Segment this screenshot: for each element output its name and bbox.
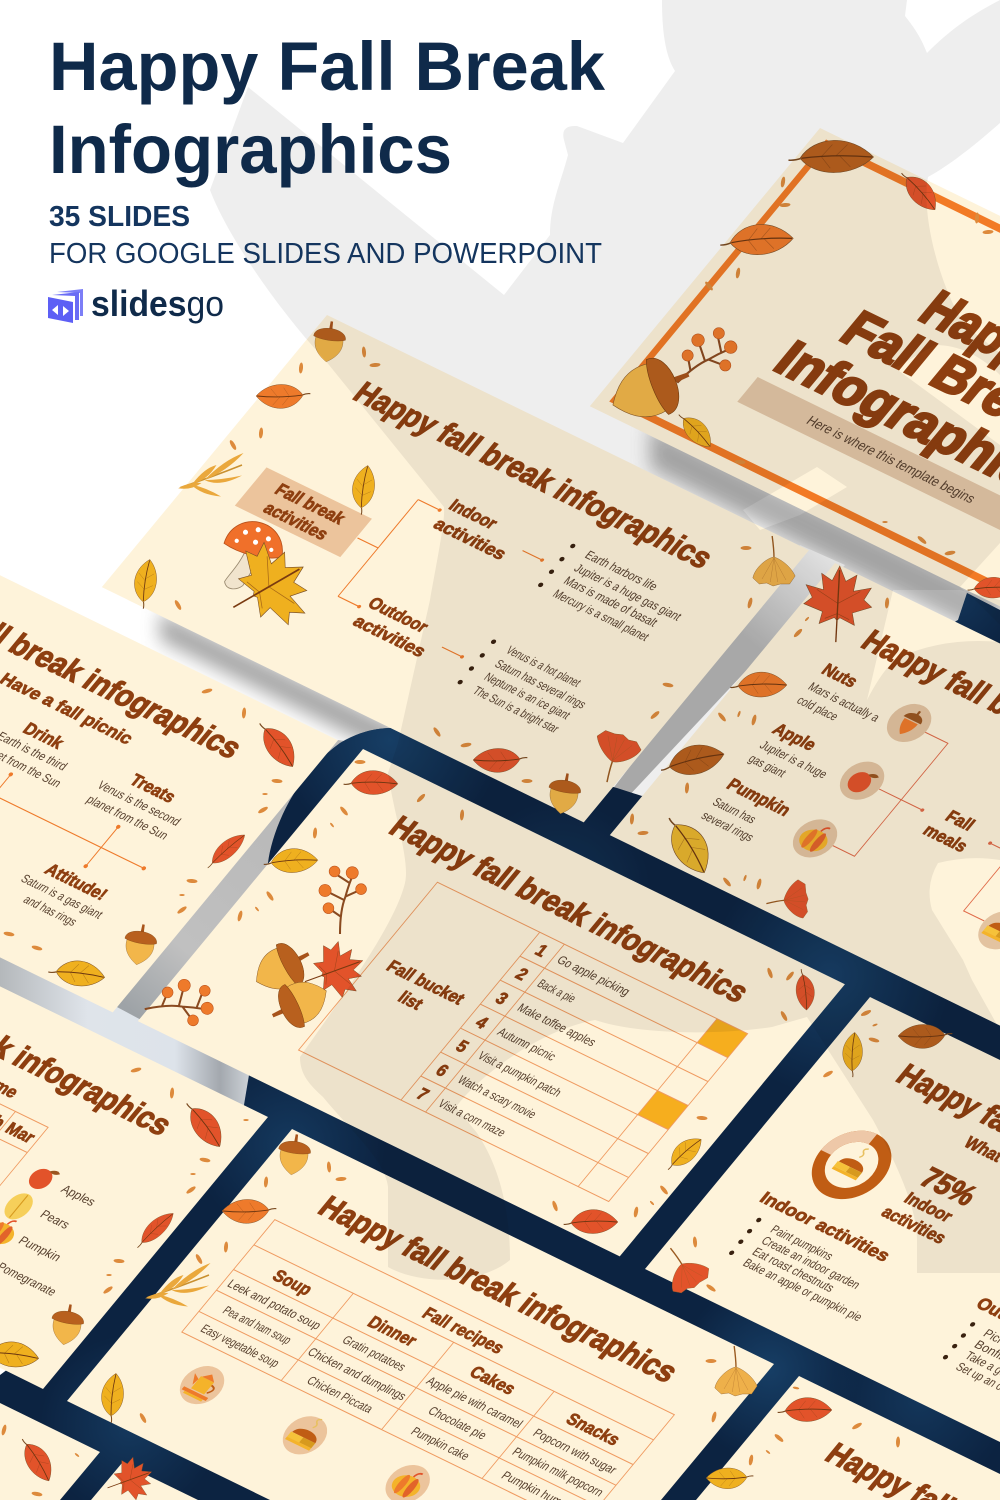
- fruit labels: Apples: [58, 1182, 99, 1209]
- list: indoor: Create an indoor garden: [758, 1234, 863, 1292]
- icon: red maple leaf: [296, 935, 372, 1008]
- icon: orange leaf: [222, 1199, 276, 1223]
- item: pumpkin: Pumpkin: [723, 775, 795, 820]
- column headings: [268, 1266, 624, 1449]
- column: soup: Leek and potato soup: [224, 1277, 324, 1333]
- logo wordmark: slidesgo: [91, 283, 224, 324]
- grey band between picnic slide and bucket list slide: [113, 740, 372, 1025]
- table items: Watch a scary movie: [455, 1073, 540, 1121]
- icon: teapot circle: [171, 1360, 233, 1411]
- icon: nut circle: [878, 698, 940, 748]
- grey band between activities slide and meals slide: [585, 545, 845, 825]
- panel: cover slide: [590, 128, 1000, 641]
- list: outdoor: The Sun is a bright star: [470, 684, 562, 736]
- icon: pie circle: [274, 1410, 336, 1461]
- column: cakes: Apple pie with caramel: [423, 1374, 526, 1431]
- slide card: [0, 1403, 100, 1500]
- icon: red leaf: [778, 1398, 832, 1422]
- table numbers: 6: [432, 1061, 453, 1080]
- slide title: Happy fall break infographics: [311, 1190, 685, 1389]
- list: indoor: [714, 1188, 911, 1324]
- list: indoor: Bake an apple or pumpkin pie: [740, 1256, 866, 1324]
- table numbers: 3: [491, 989, 512, 1008]
- table numbers: 4: [471, 1013, 493, 1033]
- list: indoor: Indoor activities: [756, 1188, 894, 1265]
- panel: fall meals slide: [610, 563, 1000, 1070]
- block: attitude: Saturn is a gas giant: [18, 872, 106, 922]
- label box: [235, 467, 372, 557]
- item: nuts: Mars is actually a: [805, 680, 883, 725]
- list: indoor: Paint pumpkins: [767, 1223, 836, 1263]
- slide card with meals text: [610, 563, 1000, 1070]
- squirrel silhouette overlay: [210, 0, 1000, 1280]
- column: dinner: [287, 1324, 427, 1424]
- list: outdoor: [930, 1294, 1000, 1424]
- panel: lower right slide: [696, 1376, 1000, 1500]
- shadow below activities slide: [160, 612, 620, 870]
- icon: berries: [662, 318, 746, 402]
- label box: activities: [259, 499, 332, 544]
- item: apple: gas giant: [745, 752, 790, 780]
- table label: Fall bucket: [382, 957, 469, 1008]
- icon: narrow red leaf: [202, 829, 250, 873]
- icon: apple circle: [831, 755, 893, 806]
- stat: 75%: [913, 1162, 983, 1212]
- icon: red leaf: [473, 748, 527, 772]
- slide count: 35 SLIDES: [49, 201, 190, 233]
- icon: acorn: [121, 922, 159, 967]
- icon: falling petals: [139, 1161, 717, 1424]
- center label: [919, 803, 986, 856]
- icon: berries left: [140, 974, 217, 1035]
- icon: sprig: [178, 453, 244, 496]
- icon: falling petals: [748, 1386, 900, 1466]
- table label: [367, 957, 469, 1027]
- column: dinner: Gratin potatoes: [339, 1333, 409, 1374]
- table items: Make toffee apples: [514, 1001, 599, 1049]
- icon: brown leaf: [788, 140, 873, 173]
- icon: yellow leaf: [47, 957, 107, 989]
- column: soup: Pea and ham soup: [220, 1304, 295, 1347]
- column: cakes: Pumpkin cake: [408, 1424, 473, 1463]
- icon: pumpkin circle: [784, 813, 846, 864]
- slide title: Happy fall break infographics: [346, 376, 720, 575]
- slidesgo logo: [48, 283, 224, 324]
- icon: pie circle: [969, 904, 1000, 956]
- connector: [0, 690, 164, 890]
- icon: corner red leaf: [968, 577, 1000, 598]
- icon: falling petals: [1, 1424, 80, 1497]
- slide text with recipes table: [142, 1178, 709, 1500]
- stat: activities: [877, 1202, 950, 1248]
- icon: maple leaf: [802, 564, 874, 644]
- icon: acorn two: [263, 970, 336, 1037]
- table items: Back a pie: [534, 977, 579, 1005]
- heading: indoor: [429, 496, 526, 564]
- fruit labels: [0, 1182, 124, 1299]
- icon: acorn: [275, 1132, 313, 1177]
- item: apple: Apple: [768, 720, 821, 754]
- icon: acorn top: [310, 319, 348, 364]
- label box: Fall break: [271, 480, 350, 528]
- slide card with activities text: [102, 315, 809, 822]
- icon: large acorn: [602, 347, 700, 432]
- table items: Visit a pumpkin patch: [475, 1049, 565, 1099]
- fruit icons: [0, 1163, 65, 1248]
- block: drink: Drink: [19, 719, 68, 753]
- item: apple: [745, 720, 846, 795]
- heading: indoor: activities: [429, 514, 511, 564]
- list: indoor: Eat roast chestnuts: [749, 1245, 838, 1295]
- icon: falling petals: [704, 176, 994, 556]
- icon: yellow leaf left: [130, 558, 160, 610]
- column headings: Snacks: [562, 1410, 624, 1449]
- column: soup: [190, 1277, 324, 1374]
- subtitle band: Here is where this template begins: [803, 413, 979, 506]
- heading: outdoor: activities: [349, 612, 430, 661]
- table items: Go apple picking: [554, 953, 633, 999]
- item: nuts: [794, 660, 899, 738]
- slide card: [696, 1376, 1000, 1500]
- list: outdoor: [453, 635, 601, 738]
- icon: yellow leaf: [348, 464, 378, 516]
- icon: red leaf right: [794, 968, 816, 1011]
- icon: orange leaf: [256, 384, 310, 408]
- icon: acorn: [48, 1302, 86, 1347]
- icon: ginkgo: [715, 1346, 757, 1396]
- stat: Indoor: [900, 1189, 957, 1226]
- connector: [316, 488, 545, 659]
- table header: [0, 1104, 40, 1147]
- icon: berries top: [319, 866, 367, 934]
- icon: sprig: [145, 1263, 210, 1306]
- table numbers: 7: [412, 1085, 433, 1104]
- table grid: [182, 1220, 674, 1500]
- table grid: [299, 882, 748, 1201]
- panel: fall recipes slide: [67, 1129, 774, 1500]
- heading: outdoor: [349, 594, 445, 661]
- icon: red leaf lower: [564, 1210, 618, 1234]
- panel: bucket list slide: [138, 749, 845, 1256]
- icon: falling petals: [102, 1067, 249, 1295]
- list: indoor: Mercury is a small planet: [550, 587, 653, 644]
- icon: yellow leaf: [0, 1338, 41, 1370]
- table header: Mar: [1, 1119, 40, 1147]
- slide card: [91, 1463, 198, 1500]
- table items: [435, 953, 644, 1147]
- icon: red maple leaf: [100, 1452, 159, 1500]
- center label: Fall: [941, 807, 979, 834]
- list: indoor: Earth harbors life: [582, 548, 661, 594]
- icon: falling petals: [693, 1009, 880, 1293]
- column: dinner: Chicken Piccata: [304, 1374, 376, 1416]
- cover title: [763, 244, 1000, 511]
- item: apple: Jupiter is a huge: [757, 738, 831, 781]
- table label: list: [394, 988, 427, 1014]
- column: snacks: [492, 1424, 624, 1500]
- connector: [831, 732, 1000, 921]
- item: pumpkin: [698, 775, 795, 849]
- icon: pumpkin circle: [376, 1459, 439, 1500]
- icon: yellow leaf lower: [660, 1131, 707, 1175]
- icon: brown leaf: [898, 1024, 952, 1048]
- slide card: [0, 858, 268, 1389]
- icon: yellow leaf: [673, 407, 718, 453]
- icon: yellow leaf: [98, 1372, 126, 1424]
- block: drink: [0, 709, 90, 790]
- table heading: Fall recipes: [418, 1304, 508, 1357]
- icon: yellow leaf: [706, 1468, 753, 1489]
- block: treats: Treats: [126, 771, 180, 806]
- table numbers: 1: [531, 941, 552, 960]
- table numbers: [412, 941, 552, 1104]
- item: nuts: cold place: [794, 693, 842, 724]
- slide card: [645, 997, 1000, 1442]
- block: treats: planet from the Sun: [83, 793, 171, 842]
- icon: falling petals: [630, 597, 889, 890]
- column: soup: Easy vegetable soup: [198, 1322, 283, 1370]
- icon: falling petals: [174, 346, 753, 783]
- icon: yellow leaf: [658, 808, 719, 881]
- icon: orange leaf: [719, 223, 794, 257]
- icon: red leaf: [15, 1432, 59, 1486]
- panel: activities slide: [102, 315, 809, 822]
- list: outdoor: Saturn has several rings: [492, 657, 589, 711]
- highlighted cells: [638, 1019, 748, 1130]
- column headings: Dinner: [364, 1313, 421, 1350]
- list: indoor: Mars is made of basalt: [561, 574, 661, 630]
- item: pumpkin: several rings: [698, 809, 757, 844]
- column: snacks: Popcorn with sugar: [530, 1426, 620, 1477]
- icon: mushroom: [215, 516, 288, 598]
- block: attitude: Attitude!: [41, 860, 112, 904]
- icon: falling petals: [237, 760, 795, 1218]
- block: treats: Venus is the second: [94, 778, 184, 829]
- fruit labels: Pears: [37, 1207, 73, 1232]
- icon: red leaf: [895, 165, 944, 216]
- list: outdoor: Venus is a hot planet: [503, 643, 584, 690]
- center label: meals: [919, 821, 972, 856]
- icon: acorn one: [245, 933, 320, 1002]
- icon: red ginkgo: [654, 1237, 713, 1298]
- icon: brown leaf: [657, 740, 727, 781]
- icon: yellow leaf: [841, 1031, 864, 1078]
- slide card with picnic text: [0, 505, 338, 1012]
- slide card with bucket list table: [138, 749, 845, 1256]
- fruit labels: Pumpkin: [15, 1234, 64, 1264]
- light band under picnic slide: [0, 950, 250, 1108]
- column headings: Cakes: [465, 1362, 520, 1398]
- title line two: Infographics: [49, 111, 452, 188]
- icon: ginkgo: [753, 536, 795, 586]
- block: attitude: [6, 854, 121, 936]
- item: nuts: Nuts: [818, 660, 862, 691]
- icon: red leaf: [343, 770, 398, 795]
- title: Happy Fall Break: [49, 28, 606, 105]
- column headings: Soup: [268, 1266, 316, 1299]
- column: cakes: Chocolate pie: [425, 1404, 490, 1442]
- block: attitude: and has rings: [20, 893, 80, 929]
- column: dinner: Chicken and dumplings: [305, 1345, 410, 1403]
- icon: red leaf: [179, 1095, 230, 1153]
- navy backdrop: [0, 593, 1000, 1500]
- table numbers: 2: [511, 965, 532, 984]
- table grid: [0, 1015, 48, 1286]
- icon: orange leaf: [730, 672, 787, 697]
- icon: yellow leaf: [263, 848, 318, 874]
- list: indoor: Jupiter is a huge gas giant: [571, 561, 685, 624]
- slide text with harvest table: [0, 943, 196, 1336]
- panel: picnic slide: [0, 505, 338, 1012]
- icon: narrow red leaf: [131, 1207, 178, 1252]
- panel: harvest calendar slide: [0, 858, 268, 1389]
- orange frame: [615, 144, 1000, 620]
- stat: [877, 1158, 987, 1248]
- subtitle band: [737, 377, 1000, 537]
- block: treats: [83, 761, 198, 843]
- heading: indoor: Indoor: [445, 496, 502, 533]
- slide card with cover text: [590, 128, 1000, 641]
- shadow below cover slide: [650, 425, 1000, 645]
- slide card: [67, 1129, 774, 1500]
- panel: lower center slide: [91, 1452, 198, 1500]
- table items: Visit a corn maze: [435, 1097, 509, 1140]
- icon: acorn bottom: [545, 771, 583, 816]
- subtitle: FOR GOOGLE SLIDES AND POWERPOINT: [49, 238, 602, 270]
- icon: logo stack: [48, 289, 83, 323]
- donut chart 75 percent: [805, 1127, 898, 1203]
- panel: lower left slide: [0, 1403, 100, 1500]
- list: outdoor: Neptune is an ice giant: [481, 670, 574, 722]
- icon: falling petals: [3, 688, 283, 951]
- item: pumpkin: Saturn has: [710, 795, 759, 826]
- icon: red leaf: [252, 715, 303, 773]
- icon: red ginkgo: [583, 727, 644, 789]
- icon: yellow maple leaf: [212, 530, 324, 644]
- column: cakes: [389, 1374, 526, 1472]
- table numbers: 5: [452, 1037, 473, 1056]
- slide title: Happy fall break infographics: [382, 810, 756, 1009]
- heading: outdoor: Outdoor: [364, 594, 433, 637]
- icon: red ginkgo: [765, 879, 810, 921]
- panel: preference slide: [645, 997, 1000, 1442]
- list: indoor: [533, 540, 696, 649]
- table items: Autumn picnic: [494, 1025, 559, 1064]
- slide text with donut and lists: [714, 1045, 1000, 1438]
